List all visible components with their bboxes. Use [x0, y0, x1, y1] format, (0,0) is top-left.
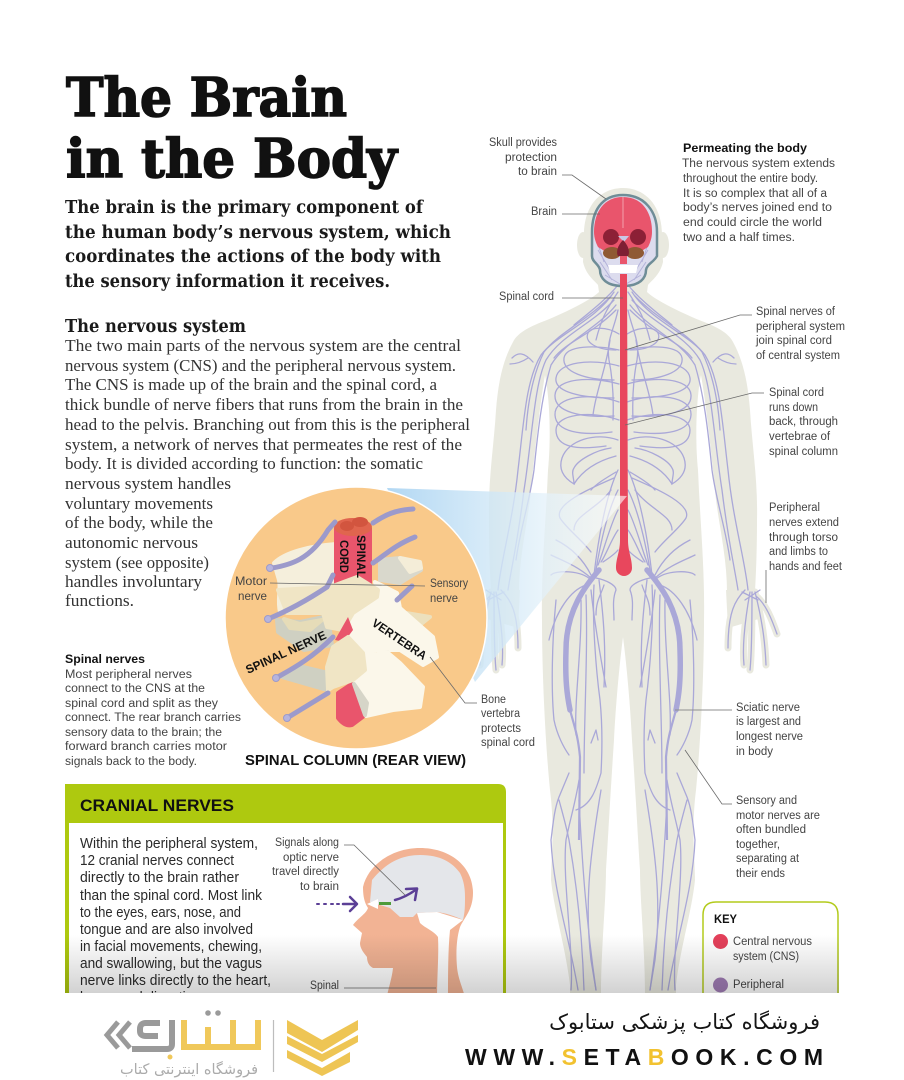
label: peripheral nerves: hands and feet [769, 561, 843, 573]
label: signals along optic nerve: to brain [300, 881, 339, 893]
title: in the Body [66, 128, 399, 190]
intro paragraph: coordinates the actions of the body with [65, 247, 441, 267]
panel text: and swallowing, but the vagus [80, 956, 262, 972]
magnifier beam [387, 488, 627, 682]
text block: nervous system: system (see opposite) [65, 553, 209, 572]
label: sensory nerve: Sensory [430, 578, 468, 590]
label: spinal nerves of peripheral system [625, 306, 845, 362]
label: motor nerve: nerve [238, 591, 267, 603]
arrow: signal to brain [395, 888, 417, 900]
label: bone vertebra: spinal cord [481, 737, 535, 749]
label: sensory and motor nerves: separating at [736, 853, 800, 865]
label: peripheral nerves: and limbs to [769, 546, 828, 558]
intro paragraph [65, 198, 451, 292]
panel text: directly to the brain rather [80, 870, 239, 886]
intro paragraph: the sensory information it receives. [65, 272, 390, 292]
store url: WWW. S ETA B OOK.COM [465, 1044, 823, 1070]
label: signals along optic nerve: optic nerve [283, 852, 339, 864]
human body nervous system figure [469, 188, 777, 995]
panel text [80, 836, 271, 1006]
title: The Brain [66, 67, 347, 129]
label: peripheral nerves: nerves extend [769, 517, 839, 529]
label: peripheral nerves [766, 502, 843, 603]
label: spinal cord runs down back: vertebrae of [769, 431, 831, 443]
panel: cranial nerves [65, 784, 506, 1006]
label: spinal cord runs down back: runs down [769, 402, 818, 414]
label: spinal cord: Spinal cord [499, 291, 554, 303]
label: spinal cord runs down back: spinal column [769, 446, 838, 458]
leader: bone vertebra [430, 657, 477, 703]
text block: permeating the body: throughout the entire body. [683, 173, 818, 185]
bottom fade [65, 935, 839, 993]
label: bone vertebra: vertebra [481, 708, 521, 720]
text block: spinal nerves: forward branch carries motor [65, 741, 227, 753]
label: spinal cord runs down back: Spinal cord [769, 387, 824, 399]
label: bone vertebra: protects [481, 723, 521, 735]
label: motor nerve: Motor [235, 576, 267, 588]
spinal nerves [268, 509, 415, 718]
title [66, 67, 399, 190]
panel text: nerve links directly to the heart, [80, 973, 271, 989]
intro paragraph: the human body’s nervous system, which [65, 223, 451, 243]
label: spinal nerves of peripheral system: join spinal cord [755, 335, 832, 347]
label: spinal cord runs down back [625, 387, 838, 458]
head cross-section diagram [272, 837, 473, 1000]
panel text: in facial movements, chewing, [80, 939, 262, 955]
label: motor nerve [235, 576, 267, 603]
text block: nervous system: voluntary movements [65, 494, 213, 513]
label: spinal cord: SPINAL [354, 535, 368, 578]
text block: permeating the body: The nervous system extends [682, 158, 835, 170]
label: sensory nerve [430, 578, 468, 605]
logo: setabook wordmark [107, 1010, 258, 1078]
vertebrae and spinal cord [274, 517, 437, 725]
label: spinal cord: CORD [337, 540, 351, 573]
text block: permeating the body: end could circle the world [683, 217, 822, 229]
legend: key [703, 902, 838, 1000]
text block: permeating the body: two and a half times. [683, 232, 795, 244]
label: sciatic nerve [675, 702, 803, 758]
text block: nervous system: handles involuntary [65, 572, 203, 591]
label: signals along optic nerve: Signals along [275, 837, 339, 849]
label: sensory and motor nerves: together, [736, 839, 780, 851]
text block: nervous system: body. It is divided according to function: the somatic [65, 454, 423, 473]
label: spinal nerves of peripheral system: of central system [756, 350, 840, 362]
text block: spinal nerves: sensory data to the brain; the [65, 727, 222, 739]
label: spinal nerves of peripheral system: peripheral system [756, 321, 845, 333]
label: sensory and motor nerves: often bundled [736, 824, 806, 836]
diagram: spinal column [225, 487, 535, 769]
text block: spinal nerves: Most peripheral nerves [65, 669, 192, 681]
text block: nervous system: of the body, while the [65, 513, 213, 532]
leader: motor and sensory nerve [270, 583, 425, 586]
panel text: 12 cranial nerves connect [80, 853, 234, 869]
text block: nervous system: nervous system (CNS) and the peripheral nervous system. [65, 356, 456, 375]
key item: central nervous system [713, 934, 812, 963]
text block: permeating the body: body’s nerves joined end to [683, 202, 832, 214]
label: spinal nerve: SPINAL NERVE [243, 628, 328, 677]
logo: gold chevrons [287, 1020, 358, 1076]
label: sciatic nerve: in body [736, 746, 773, 758]
panel text: than the spinal cord. Most link [80, 888, 263, 904]
text block: nervous system [65, 336, 470, 610]
text block: nervous system: autonomic nervous [65, 533, 198, 552]
text block: spinal nerves: spinal cord and split as they [65, 698, 218, 710]
panel text: to the eyes, ears, nose, and [80, 905, 241, 921]
text block: permeating the body [682, 143, 835, 244]
footer banner [0, 993, 904, 1080]
label: signals along optic nerve [272, 837, 405, 895]
text block: nervous system: system, a network of nerves that permeates the rest of the [65, 435, 462, 454]
label: sensory and motor nerves: Sensory and [736, 795, 797, 807]
arrow: light entering eye [317, 897, 357, 911]
label: sensory and motor nerves: motor nerves are [736, 810, 820, 822]
label: sciatic nerve: longest nerve [736, 731, 803, 743]
logo: setabook wordmark: فروشگاه اینترنتی کتاب [120, 1061, 258, 1078]
text block: nervous system: head to the pelvis. Branching out from this is the peripheral [65, 415, 470, 434]
text block: permeating the body: Permeating the body [683, 143, 808, 155]
label: sensory and motor nerves: their ends [736, 868, 785, 880]
panel text: Within the peripheral system, [80, 836, 258, 852]
label: skull: to brain [518, 166, 557, 178]
text block: nervous system: The CNS is made up of the brain and the spinal cord, a [65, 375, 438, 394]
text block: spinal nerves: Spinal nerves [65, 654, 145, 666]
label: spinal cord [337, 535, 368, 578]
label: peripheral nerves: Peripheral [769, 502, 820, 514]
panel text: lungs, and digestive [80, 990, 200, 1006]
caption: spinal column: SPINAL COLUMN (REAR VIEW) [245, 752, 466, 769]
text block: spinal nerves: connect. The rear branch carries [65, 712, 241, 724]
label: spinal cord runs down back: back, through [769, 416, 838, 428]
label: vertebra: VERTEBRA [369, 616, 430, 663]
label: spinal nerves of peripheral system: Spinal nerves of [756, 306, 836, 318]
label: bone vertebra [481, 694, 535, 749]
text block: nervous system: nervous system handles [65, 474, 231, 493]
key item: peripheral: Peripheral [733, 979, 784, 991]
label: peripheral nerves: through torso [769, 532, 838, 544]
legend: key: KEY [714, 912, 737, 926]
text block: permeating the body: It is so complex that all of a [683, 188, 828, 200]
label: brain: Brain [531, 206, 557, 218]
label: spinal [310, 980, 436, 992]
heading: the nervous system: The nervous system [65, 317, 246, 337]
intro paragraph: The brain is the primary component of [65, 198, 424, 218]
label: bone vertebra: Bone [481, 694, 506, 706]
skull and brain [592, 195, 657, 286]
text block: nervous system: thick bundle of nerve fibers that runs from the brain in the [65, 395, 463, 414]
text block: nervous system: functions. [65, 591, 134, 610]
label: spinal: Spinal [310, 980, 339, 992]
label: skull: protection [505, 152, 557, 164]
label: skull: Skull provides [489, 137, 557, 149]
key item: central nervous system: system (CNS) [733, 951, 799, 963]
label: sciatic nerve: Sciatic nerve [736, 702, 800, 714]
panel heading: CRANIAL NERVES [80, 796, 234, 815]
label: brain [531, 206, 600, 218]
label: spinal cord [499, 291, 623, 303]
label: sciatic nerve: is largest and [736, 716, 801, 728]
spinal cord [616, 274, 632, 576]
store name: فروشگاه کتاب پزشکی ستابوک [549, 1010, 820, 1034]
panel text: tongue and are also involved [80, 922, 253, 938]
text block: nervous system: The two main parts of the nervous system are the central [65, 336, 461, 355]
label: skull [489, 137, 606, 199]
label: sensory nerve: nerve [430, 593, 458, 605]
label: signals along optic nerve: travel directly [272, 866, 339, 878]
label: sensory and motor nerves [685, 750, 820, 880]
text block: spinal nerves: connect to the CNS at the [65, 683, 205, 695]
key item: central nervous system: Central nervous [733, 936, 812, 948]
text block: spinal nerves [65, 654, 241, 768]
text block: spinal nerves: signals back to the body. [65, 756, 197, 768]
